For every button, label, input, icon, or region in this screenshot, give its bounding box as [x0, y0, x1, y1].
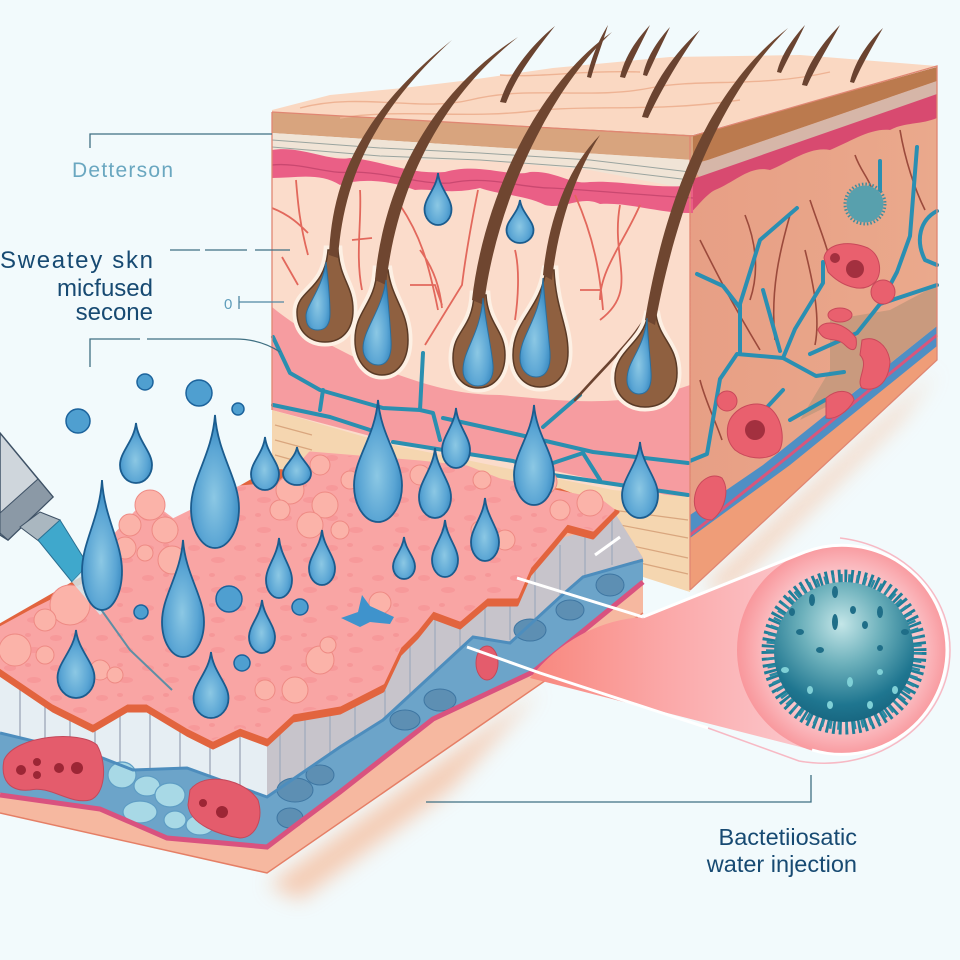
follicle 4 — [513, 135, 600, 387]
red cells, right face — [694, 244, 895, 520]
needle — [100, 608, 172, 690]
label: sweaty skin: micfused — [57, 275, 153, 302]
right face tan patch — [800, 285, 937, 420]
leader line: middle — [90, 339, 280, 367]
magnified bubble — [530, 545, 948, 755]
leader line: bottom — [426, 775, 811, 802]
bubble red rim — [737, 545, 947, 755]
surface spots — [0, 453, 613, 740]
right face — [690, 67, 937, 590]
right face pink band — [688, 94, 937, 215]
label: Detterson: Detterson — [72, 159, 173, 182]
front face lower pink tissue — [272, 307, 690, 500]
follicle 2 — [355, 37, 518, 375]
brick lines — [275, 425, 688, 574]
cell nuclei — [16, 758, 228, 818]
right cell layer — [277, 574, 624, 828]
surface rim — [0, 470, 618, 748]
column strokes — [20, 520, 612, 790]
pink band divider — [272, 165, 693, 198]
white pointer lines — [467, 537, 708, 728]
blue layer cells — [108, 762, 214, 835]
blue cell layer — [0, 560, 643, 847]
icon: syringe — [0, 433, 172, 690]
slab front base — [0, 510, 643, 873]
magenta vessel — [0, 582, 643, 847]
inner spikes — [772, 580, 916, 724]
right face magenta line — [690, 335, 937, 535]
white-blue top line — [0, 560, 643, 797]
front face tan band — [272, 112, 693, 160]
panel: lower skin slab — [0, 453, 643, 873]
column layer right — [267, 510, 643, 797]
small blue splash — [341, 595, 394, 627]
right face blue band — [690, 326, 937, 538]
outer spikes — [768, 576, 920, 728]
label: bacteriostatic water injection: Bactetiiosatic — [719, 824, 857, 850]
slab bottom outline — [0, 613, 643, 873]
bubble white outline — [643, 545, 947, 754]
surface bumps — [0, 455, 603, 703]
red cell nuclei — [745, 253, 864, 440]
red cells — [3, 646, 498, 838]
short hairs — [500, 25, 883, 118]
brick layer — [272, 410, 690, 592]
label: sweaty skin: secone — [76, 299, 153, 326]
body — [774, 582, 914, 722]
teal spiky ball — [845, 184, 885, 224]
halo — [297, 250, 353, 342]
bacterium — [768, 576, 920, 728]
front face blue vessels — [273, 337, 688, 495]
secondary hair — [575, 300, 655, 400]
blue hub — [38, 520, 88, 582]
barrel — [0, 433, 53, 540]
follicle 1 — [297, 40, 452, 342]
right face tan band — [690, 67, 937, 165]
right face blue vessels — [680, 147, 937, 465]
top face creases — [300, 72, 830, 118]
right face capillaries — [700, 130, 925, 440]
front face pink wavy band — [272, 149, 693, 213]
right face lower peach strip — [690, 343, 937, 590]
right face striated band — [690, 81, 937, 178]
leader line: short — [239, 296, 284, 309]
block edge outline — [272, 66, 937, 590]
front face dermis — [272, 135, 690, 590]
striations — [272, 140, 690, 180]
bubble outer pink line — [708, 538, 950, 763]
surface top — [0, 453, 613, 740]
top face — [272, 55, 937, 135]
label: bacteriostatic water injection — [706, 824, 857, 877]
column layer left — [0, 667, 267, 797]
label: sweaty skin: Sweatey skn — [0, 247, 153, 274]
dark surface spots — [789, 586, 909, 653]
collar — [0, 479, 53, 540]
follicle 5 — [615, 28, 788, 407]
upper sweat drops — [424, 173, 534, 243]
metal neck — [20, 512, 60, 542]
panel: upper skin block — [272, 25, 937, 592]
light surface spots — [781, 667, 898, 709]
label: sweaty skin — [0, 247, 153, 326]
label: bacteriostatic water injection: water injection — [706, 851, 857, 877]
label: 0: 0 — [224, 296, 232, 313]
hair — [329, 40, 452, 258]
needle tip — [72, 565, 112, 615]
water drops — [58, 400, 658, 718]
bulb — [297, 250, 353, 342]
sweat drop — [306, 262, 330, 330]
front face striated band — [272, 133, 693, 190]
water spheres — [66, 374, 308, 671]
leader line: top — [90, 134, 272, 148]
follicle 3 — [453, 32, 612, 388]
block shadow — [700, 370, 937, 590]
leader line: dashed — [170, 249, 290, 251]
panel: callout bubble — [530, 538, 950, 763]
slab shadow — [268, 690, 540, 900]
front face capillaries — [272, 180, 640, 345]
